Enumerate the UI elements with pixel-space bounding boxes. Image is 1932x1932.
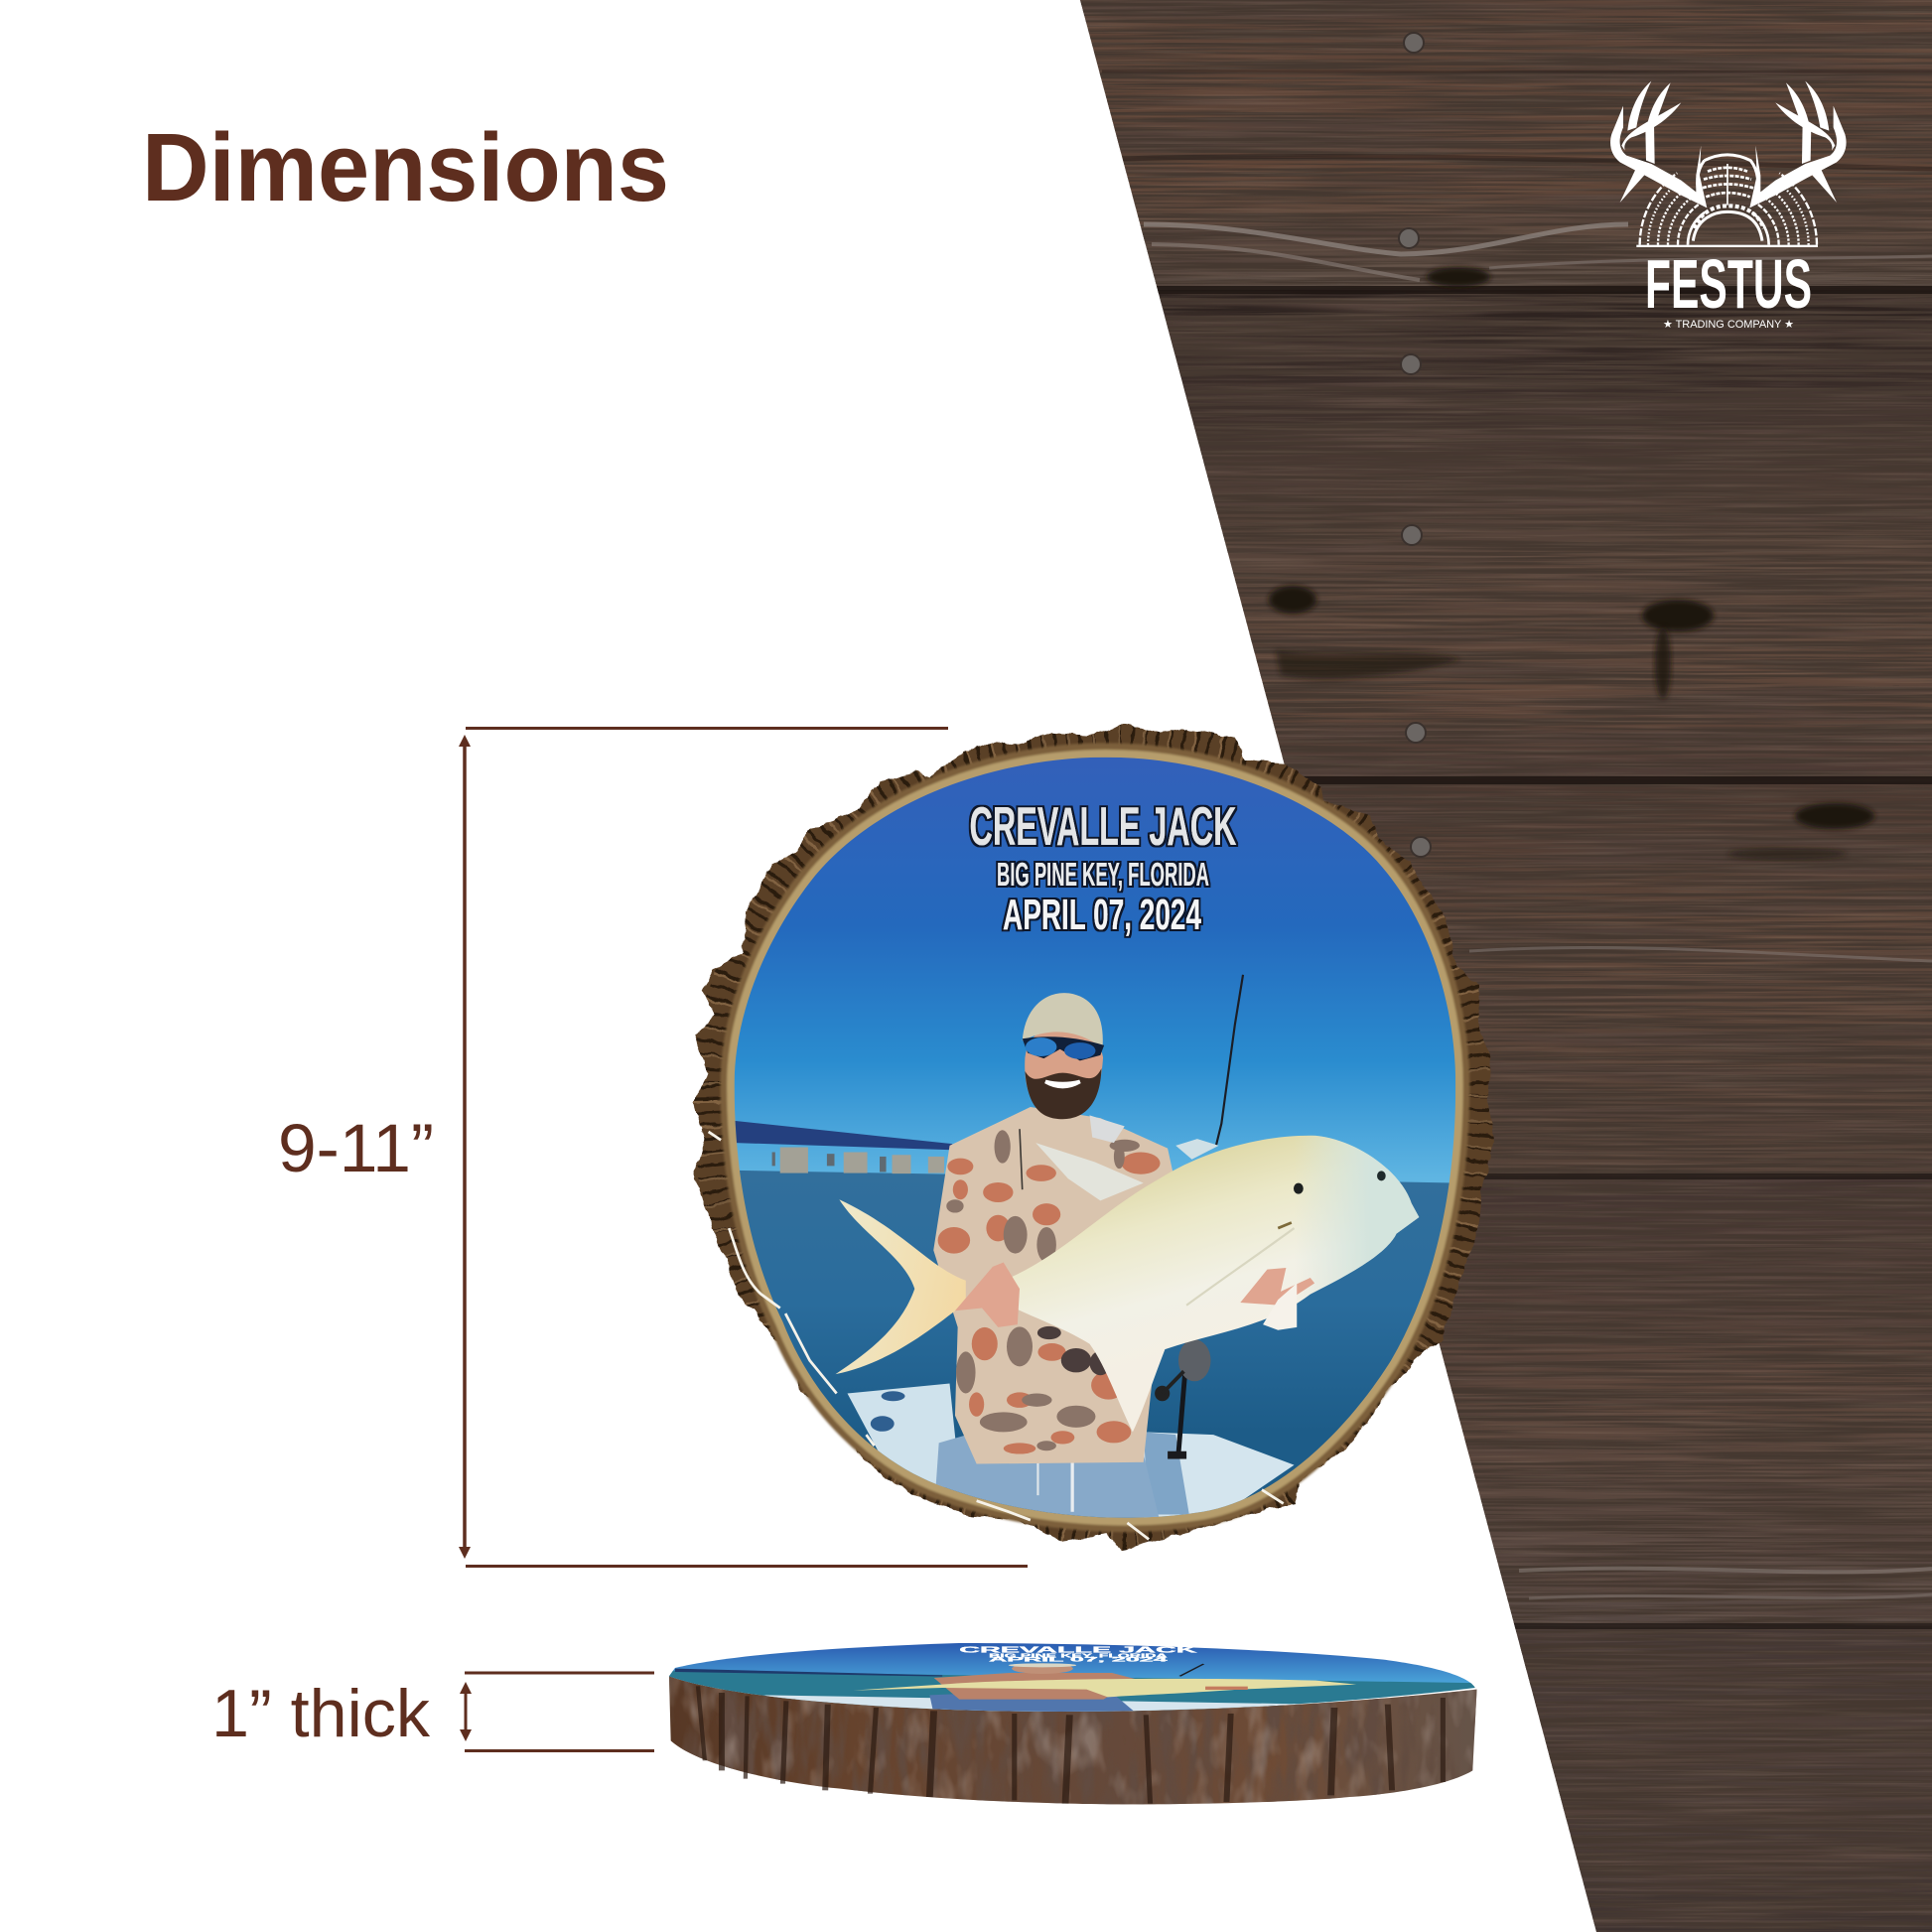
bridge xyxy=(735,1121,952,1173)
height dimension bracket xyxy=(459,729,1028,1567)
tree ring emblem xyxy=(1636,155,1818,247)
logo tagline: ★ TRADING COMPANY ★ xyxy=(1663,319,1794,331)
photo caption: species: CREVALLE JACK xyxy=(969,795,1237,857)
tilted photo caption: BIG PINE KEY, FLORIDA xyxy=(989,1653,1168,1659)
bark edge xyxy=(675,705,1515,1564)
photo caption: date: APRIL 07, 2024 xyxy=(1003,891,1201,939)
bark vertical furrows xyxy=(698,1686,1443,1804)
bark side wall xyxy=(669,1676,1477,1804)
thickness dimension bracket xyxy=(460,1673,654,1751)
fish xyxy=(836,1136,1419,1432)
title: Dimensions xyxy=(142,113,669,221)
bark grain dark xyxy=(669,1676,1477,1804)
logo: Festus Trading Company xyxy=(1610,81,1847,331)
wood slice front view with photo xyxy=(675,705,1515,1564)
panel: wood plank background xyxy=(1072,0,1932,1932)
tan inner rim xyxy=(735,758,1455,1518)
photo: angler with crevalle jack xyxy=(729,755,1461,1526)
tilted photo caption xyxy=(959,1646,1198,1663)
label: height: 9-11” xyxy=(278,1110,434,1186)
wood slice side view xyxy=(662,1641,1485,1804)
tilted photo top xyxy=(669,1643,1475,1712)
bark grain light xyxy=(669,1676,1477,1804)
right antler xyxy=(1749,81,1847,207)
rim gloss highlights xyxy=(709,1132,1284,1540)
camo shirt xyxy=(933,1107,1173,1464)
label: thickness: 1” thick xyxy=(211,1676,431,1751)
tilted photo caption: APRIL 07, 2024 xyxy=(989,1656,1169,1663)
head xyxy=(1023,993,1104,1119)
photo caption: location: BIG PINE KEY, FLORIDA xyxy=(997,856,1209,893)
left antler xyxy=(1610,81,1707,207)
tilted photo caption: CREVALLE JACK xyxy=(959,1646,1198,1655)
logo wordmark: FESTUS xyxy=(1645,245,1812,323)
hands xyxy=(955,1262,1314,1327)
